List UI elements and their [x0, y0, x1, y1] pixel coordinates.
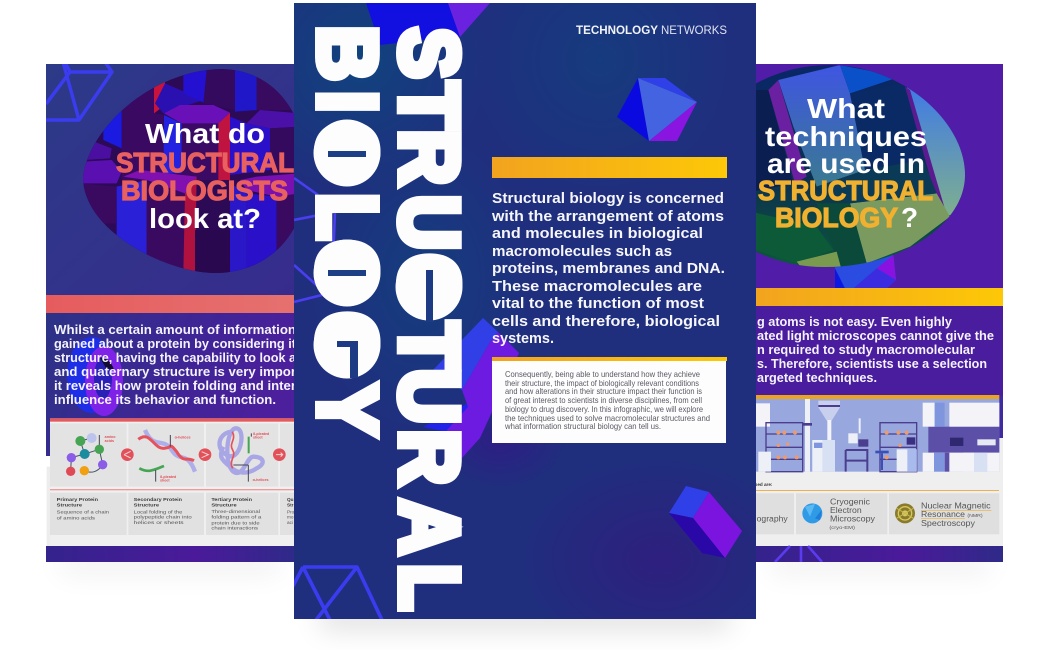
panel: structure descriptions: folding pattern of a [211, 515, 262, 520]
diagram: tertiary structure [220, 428, 269, 482]
callout: white text box [492, 357, 727, 443]
text block: introduction: cells and therefore, biological [492, 314, 720, 330]
text block: introduction: vital to the function of most [492, 296, 704, 312]
panel: structure descriptions: Structure [134, 503, 159, 508]
diagram: amino acid chain: acids [105, 439, 114, 443]
panel: structure descriptions: Secondary Protein [134, 497, 182, 502]
heading: What techniques are used in Structural Biology: STRUCTURAL [758, 175, 933, 206]
diagram: amino acid chain: amino [105, 435, 116, 439]
diagram: tertiary structure: α-helices [253, 478, 269, 482]
text: Cryogenic Electron Microscopy: (cryo-EM) [829, 525, 855, 531]
panel: structure descriptions: Str [287, 503, 294, 508]
panel: structure descriptions: aci [287, 520, 293, 525]
heading: What techniques are used in Structural Biology: What [807, 93, 885, 124]
callout: white text box: their structure, the impact of biologically relevant conditions [505, 379, 699, 388]
icon: polyhedron behind oval [835, 255, 896, 288]
icon: purple cuboid [669, 486, 742, 558]
lower page background [754, 438, 1003, 546]
text block: introduction: These macromolecules are [492, 279, 702, 295]
illustration: laboratory [753, 395, 999, 472]
heading: What do Structural Biologists look at: STRUCTURAL [116, 147, 294, 178]
text: Nuclear Magnetic Resonance Spectroscopy [921, 501, 991, 528]
title: Structural Biology: BIOLOGY [301, 26, 394, 435]
heading: What techniques are used in Structural Biology: techniques [765, 121, 927, 152]
icon: wireframe behind title [294, 178, 335, 302]
label: techniques used are: used are: [752, 482, 773, 487]
diagram: tertiary structure: ß-pleated [253, 432, 269, 436]
title: Structural Biology: STRUCTURAL [383, 28, 476, 611]
icon: wireframe polyhedron top left [46, 62, 112, 120]
text: Nuclear Magnetic Resonance Spectroscopy: (NMR) [967, 513, 983, 519]
image: oval of hexagonal columns [83, 69, 294, 273]
panel: structure descriptions: polypeptide chain into [134, 515, 192, 520]
panel: protein structure diagrams [47, 418, 300, 552]
panel: structure descriptions: mo [287, 515, 294, 520]
panel: structure descriptions: Local folding of the [134, 509, 183, 514]
text block: imaging atoms: ated light microscopes cannot give the [757, 328, 994, 343]
callout: white text box: what information structural biology can tell us. [504, 422, 661, 431]
callout: white text box: the techniques used to solve macromolecular structures and [505, 414, 710, 423]
logo: Technology Networks [576, 23, 727, 37]
panel: technique cards [753, 493, 999, 534]
panel: structure descriptions: Pro [287, 509, 295, 514]
text block: protein structure intro: it reveals how protein folding and inter [54, 378, 296, 393]
panel: structure descriptions: of amino acids [57, 516, 96, 521]
text block: introduction: systems. [492, 331, 554, 347]
heading: What do Structural Biologists look at: What do [145, 118, 265, 149]
heading: What techniques are used in Structural Biology: are used in [767, 148, 925, 179]
callout: white text box: of great interest to scientists in diverse disciplines, from cell [505, 396, 702, 405]
panel: structure descriptions: Sequence of a chain [57, 509, 109, 514]
text block: imaging atoms: n required to study macromolecular [757, 342, 975, 357]
image: oval of blue-green columns [756, 65, 965, 267]
text: Cryogenic Electron Microscopy: Cryogenic [830, 496, 870, 506]
icon: 3D ring [67, 337, 123, 416]
icon: centre blue-purple block behind title [423, 318, 519, 458]
heading: What do Structural Biologists look at [116, 118, 294, 234]
text block: introduction: with the arrangement of atoms [491, 209, 724, 225]
footer band [46, 546, 296, 562]
callout: white text box: biology to drug discovery. In this infographic, we will explore [505, 405, 703, 414]
arrows between structures [121, 448, 286, 461]
text block: introduction: proteins, membranes and DNA. [492, 261, 725, 277]
text block: protein structure intro: and quaternary structure is very impor [54, 364, 296, 379]
icon: octahedron [617, 78, 697, 141]
text: Cryogenic Electron Microscopy [830, 498, 875, 530]
text: Nuclear Magnetic Resonance Spectroscopy: Spectroscopy [921, 518, 976, 528]
section background [756, 306, 1003, 396]
panel: right infographic page [756, 64, 1003, 562]
text block: protein structure intro: gained about a protein by considering it [54, 336, 297, 351]
diagram: secondary structure helix: α-helices [175, 436, 191, 440]
text block: protein structure intro: structure, having the capability to look a [54, 350, 297, 365]
icon: NMR atom [895, 503, 915, 523]
text block: protein structure intro [54, 322, 297, 407]
diagram: amino acid chain [66, 433, 116, 476]
panel: technique cards: ography [757, 513, 789, 523]
text: Nuclear Magnetic Resonance Spectroscopy: Nuclear Magnetic [921, 501, 991, 511]
title: Structural Biology [314, 25, 464, 612]
callout: white text box: and how alterations in their structure impact their function is [505, 387, 702, 396]
panel: structure descriptions: chain interactions [211, 526, 259, 531]
panel: structure descriptions: Primary Protein [57, 497, 98, 502]
callout: white text box: Consequently, being able to understand how they achieve [505, 370, 700, 379]
text block: protein structure intro: Whilst a certain amount of information [54, 322, 296, 337]
heading: What techniques are used in Structural Biology [758, 93, 933, 233]
text block: introduction: Structural biology is concerned [492, 191, 724, 207]
panel: structure descriptions: Structure [211, 503, 237, 508]
text block: protein structure intro: influence its behavior and function. [54, 392, 276, 407]
gold bar [492, 157, 727, 178]
logo: Technology Networks: TECHNOLOGY [576, 23, 659, 37]
diagram: tertiary structure: sheet [253, 436, 263, 440]
text: Nuclear Magnetic Resonance Spectroscopy: Resonance [921, 509, 965, 519]
text block: imaging atoms [757, 314, 994, 385]
icon: top blue polyhedron [366, 3, 490, 45]
text: Cryogenic Electron Microscopy: Electron [830, 505, 862, 515]
panel: structure descriptions: helices or sheets [134, 520, 185, 525]
logo: Technology Networks: NETWORKS [661, 23, 727, 37]
panel: structure descriptions: Tertiary Protein [211, 497, 252, 502]
text block: imaging atoms: s. Therefore, scientists use a selection [757, 356, 987, 371]
heading: What do Structural Biologists look at: BIOLOGISTS [121, 175, 288, 206]
text block: imaging atoms: argeted techniques. [757, 370, 877, 385]
panel: left infographic page [46, 62, 313, 562]
panel: structure descriptions: protein due to side [211, 520, 260, 525]
diagram: secondary structure helix: ß-pleated [160, 475, 176, 479]
heading: What techniques are used in Structural Biology: BIOLOGY [775, 202, 898, 233]
text block: introduction: macromolecules such as [492, 244, 672, 260]
diagram: secondary structure helix: sheet [160, 478, 170, 482]
section background [46, 313, 296, 456]
panel: centre cover page [294, 3, 756, 619]
title letter counters [314, 120, 462, 378]
card shadows [60, 552, 990, 628]
panel: structure descriptions: Structure [57, 503, 82, 508]
text block: introduction: and molecules in biological [492, 226, 703, 242]
text: Cryogenic Electron Microscopy: Microscopy [830, 514, 876, 524]
salmon band [46, 295, 296, 313]
text block: imaging atoms: g atoms is not easy. Even highly [757, 314, 953, 329]
panel: structure descriptions: Qu [287, 497, 294, 502]
text block: introduction [491, 191, 725, 347]
gold band [754, 288, 1003, 306]
icon: cryo-EM sphere [802, 503, 822, 523]
footer band with wireframe [754, 546, 1003, 562]
heading: What techniques are used in Structural Biology: ? [901, 202, 918, 233]
panel: structure descriptions [50, 493, 297, 535]
panel: structure descriptions: Three-dimensional [211, 509, 260, 514]
diagram: secondary structure helix [138, 430, 195, 482]
icon: wireframe bottom left [293, 567, 382, 620]
heading: What do Structural Biologists look at: look at? [149, 203, 261, 234]
